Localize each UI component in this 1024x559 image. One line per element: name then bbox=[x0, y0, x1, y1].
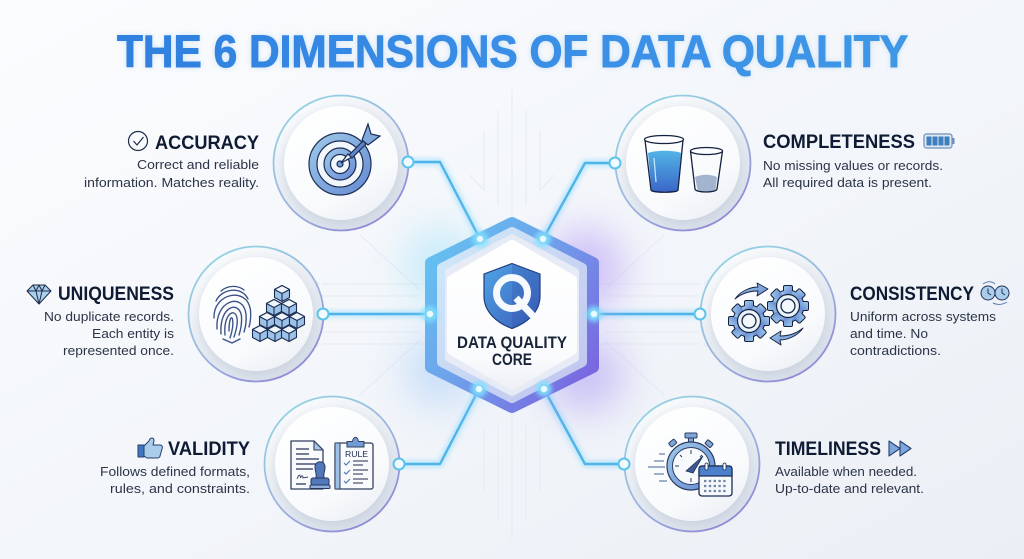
center hexagon: data quality core bbox=[404, 223, 625, 413]
icon: shield with Q bbox=[484, 264, 540, 328]
title: THE 6 DIMENSIONS OF DATA QUALITY bbox=[117, 26, 908, 77]
text block: consistency: CONSISTENCY bbox=[850, 283, 974, 305]
icon: diamond bbox=[27, 285, 51, 304]
panel: uniqueness circle bbox=[188, 246, 324, 382]
icon: rule clipboard: RULE bbox=[345, 449, 368, 459]
text block: accuracy: information. Matches reality. bbox=[84, 176, 259, 190]
icon: stopwatch with speed lines bbox=[648, 433, 715, 490]
text block: accuracy bbox=[84, 132, 259, 190]
text block: completeness bbox=[763, 131, 954, 190]
title: THE 6 DIMENSIONS OF DATA QUALITY bbox=[117, 26, 908, 77]
text block: consistency: contradictions. bbox=[850, 344, 941, 358]
text block: uniqueness: No duplicate records. bbox=[44, 310, 174, 324]
core label bbox=[457, 334, 567, 369]
text block: consistency bbox=[850, 282, 1009, 358]
text block: uniqueness: UNIQUENESS bbox=[58, 283, 174, 305]
hexagon nodes bbox=[422, 231, 602, 397]
icon: fast forward bbox=[889, 441, 911, 456]
text block: timeliness: TIMELINESS bbox=[775, 438, 881, 460]
icon: target with dart bbox=[309, 124, 380, 195]
panel: completeness circle bbox=[616, 96, 750, 230]
icon: document with stamp bbox=[291, 441, 330, 489]
circuit pattern background bbox=[314, 90, 710, 540]
text block: uniqueness: represented once. bbox=[63, 344, 174, 358]
icon: gears with arrows bbox=[729, 283, 808, 345]
text block: completeness: All required data is present. bbox=[763, 176, 932, 190]
text block: validity: VALIDITY bbox=[168, 438, 250, 460]
text block: consistency: and time. No bbox=[850, 327, 928, 341]
icon: pyramid of cubes bbox=[252, 286, 304, 342]
icon: full and part-filled glasses bbox=[644, 136, 722, 192]
text block: completeness: No missing values or records. bbox=[763, 159, 943, 173]
text block: accuracy: ACCURACY bbox=[155, 132, 259, 154]
text block: timeliness bbox=[775, 438, 924, 496]
text block: timeliness: Up-to-date and relevant. bbox=[775, 482, 924, 496]
panel: validity circle bbox=[264, 396, 400, 532]
panel: accuracy circle bbox=[274, 96, 408, 230]
text block: validity bbox=[100, 438, 250, 496]
icon: thumbs up bbox=[138, 438, 162, 458]
icon: calendar bbox=[699, 463, 732, 496]
icon: paired clocks bbox=[981, 282, 1009, 304]
text block: completeness: COMPLETENESS bbox=[763, 131, 915, 153]
text block: validity: rules, and constraints. bbox=[110, 482, 250, 496]
icon: fingerprint bbox=[214, 286, 251, 343]
text block: consistency: Uniform across systems bbox=[850, 310, 996, 324]
icon: check circle bbox=[128, 132, 148, 150]
text block: uniqueness bbox=[27, 283, 174, 358]
ring nodes bbox=[318, 156, 706, 470]
core label: CORE bbox=[492, 351, 532, 369]
core label: DATA QUALITY bbox=[457, 334, 567, 352]
text block: timeliness: Available when needed. bbox=[775, 465, 917, 479]
panel: consistency circle bbox=[700, 246, 836, 382]
icon: battery bbox=[924, 134, 954, 148]
text block: accuracy: Correct and reliable bbox=[137, 158, 259, 172]
text block: uniqueness: Each entity is bbox=[92, 327, 174, 341]
panel: timeliness circle bbox=[624, 396, 760, 532]
text block: validity: Follows defined formats, bbox=[100, 465, 250, 479]
connectors bbox=[323, 162, 700, 464]
